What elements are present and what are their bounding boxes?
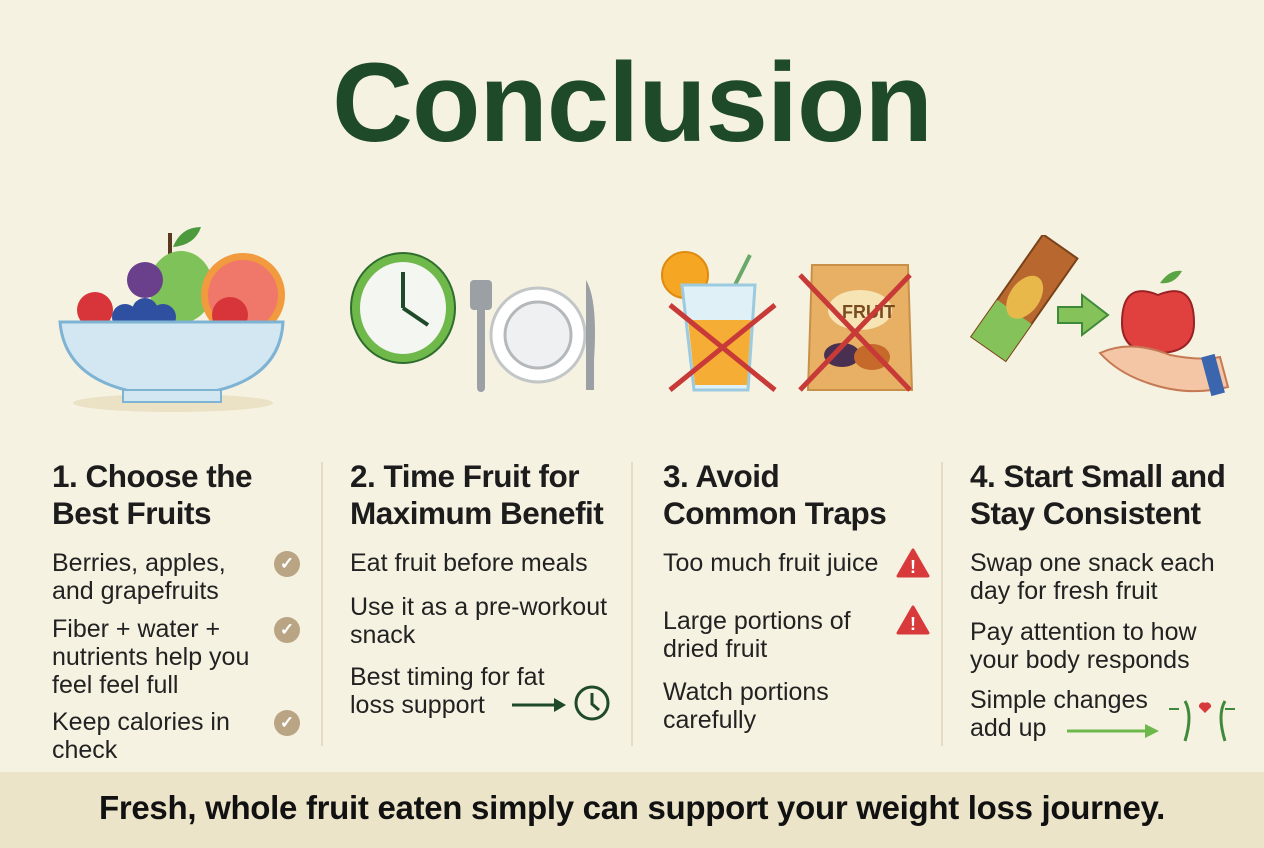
icon: crossed juice and dried fruit (661, 251, 913, 392)
text 4b: your body responds (970, 646, 1190, 674)
check 1a: ✓ (280, 554, 294, 573)
check 1a (274, 551, 300, 577)
text 4b: Pay attention to how (970, 618, 1197, 646)
text 3c: Watch portions (663, 678, 829, 706)
heading 1: Best Fruits (52, 495, 211, 531)
text 1a: Berries, apples, (52, 549, 226, 577)
text 4a (970, 549, 1215, 605)
text 2c (350, 663, 545, 719)
text 2b (350, 593, 607, 649)
text 3b (663, 607, 851, 663)
text 3a: Too much fruit juice (663, 549, 878, 577)
icon: crossed juice and dried fruit: FRUIT (842, 302, 895, 322)
text 2b: Use it as a pre-workout (350, 593, 607, 621)
dividers (321, 462, 323, 746)
panel: start small (970, 458, 1235, 742)
heading 3 (663, 458, 886, 531)
text 3c: carefully (663, 706, 756, 734)
check 1b: ✓ (280, 620, 294, 639)
text 1c: Keep calories in (52, 708, 230, 736)
panel: avoid traps (663, 458, 930, 734)
arrow and clock icon (512, 686, 610, 720)
warning 3b (896, 605, 930, 634)
text 3c (663, 678, 829, 734)
text 1b: nutrients help you (52, 643, 249, 671)
heading 3: Common Traps (663, 495, 886, 531)
text 2a: Eat fruit before meals (350, 549, 588, 577)
check 1c (274, 710, 300, 736)
text 2c: loss support (350, 691, 485, 719)
text 2c: Best timing for fat (350, 663, 545, 691)
text 2b: snack (350, 621, 415, 649)
heading 4: 4. Start Small and (970, 458, 1225, 494)
text 4b (970, 618, 1197, 674)
text 1a (52, 549, 226, 605)
text 4a: Swap one snack each (970, 549, 1215, 577)
text 1c (52, 708, 230, 764)
heading 2 (350, 458, 604, 531)
icon: snack bar swap to apple (970, 235, 1230, 396)
text 3b: dried fruit (663, 635, 767, 663)
text 1a: and grapefruits (52, 577, 219, 605)
warning 3a (896, 548, 930, 578)
heading 2: 2. Time Fruit for (350, 458, 579, 494)
text 1b (52, 615, 249, 699)
warning 3b: ! (910, 614, 916, 634)
panel: choose the best fruits (52, 458, 300, 764)
title: Conclusion (332, 40, 932, 165)
heading 4: Stay Consistent (970, 495, 1201, 531)
footer banner (0, 772, 1264, 848)
text 4c: Simple changes (970, 686, 1148, 714)
heading 4 (970, 458, 1225, 531)
icon: clock and plate (350, 252, 595, 392)
heading 1: 1. Choose the (52, 458, 252, 494)
icon: fruit bowl (58, 227, 285, 412)
text 4c: add up (970, 714, 1046, 742)
text 3b: Large portions of (663, 607, 851, 635)
text 1c: check (52, 736, 117, 764)
check 1c: ✓ (280, 713, 294, 732)
heading 2: Maximum Benefit (350, 495, 603, 531)
arrow and waist icon (1067, 700, 1235, 742)
heading 1 (52, 458, 252, 531)
text 1b: feel feel full (52, 671, 178, 699)
heading 3: 3. Avoid (663, 458, 779, 494)
check 1b (274, 617, 300, 643)
text 4a: day for fresh fruit (970, 577, 1158, 605)
warning 3a: ! (910, 557, 916, 577)
panel: time fruit (350, 458, 610, 720)
text 4c (970, 686, 1148, 742)
footer banner: Fresh, whole fruit eaten simply can support your weight loss journey. (99, 789, 1165, 826)
text 1b: Fiber + water + (52, 615, 220, 643)
